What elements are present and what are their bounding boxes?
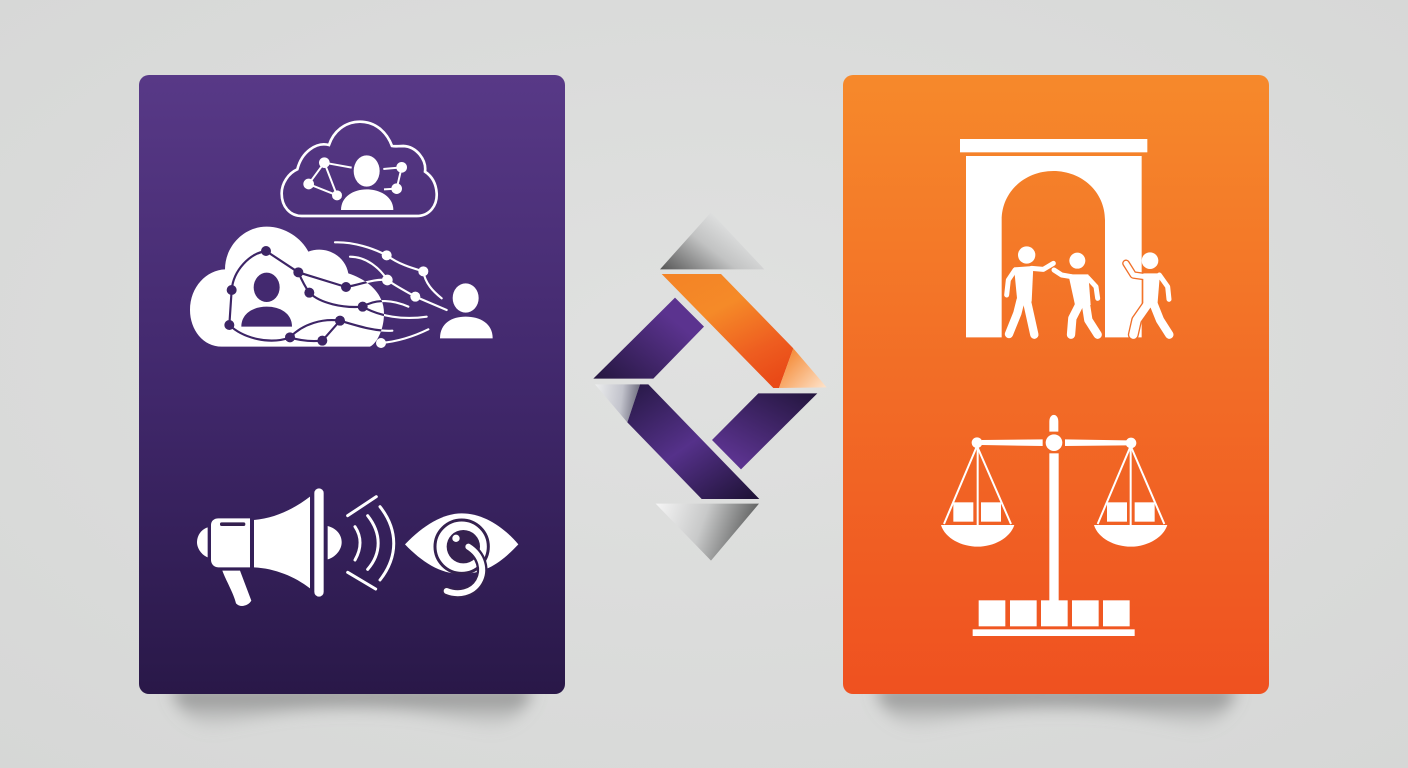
icon: eye with chain link: [405, 513, 518, 593]
purple ribbon upper left: [593, 298, 704, 379]
bottom grey triangle: [656, 504, 759, 561]
center diamond logo: [593, 212, 827, 561]
orange ribbon fold tip: [779, 348, 827, 388]
purple ribbon lower right: [712, 393, 817, 469]
infographic canvas: [139, 75, 1269, 732]
panel shadow: right: [876, 688, 1236, 728]
icon: outlined cloud with person and network: [282, 122, 437, 216]
purple ribbon long lower left: [627, 384, 759, 499]
panel shadow: left: [172, 688, 532, 728]
icon: three people at the arch: [1007, 246, 1169, 335]
panel: purple left: [139, 75, 565, 694]
orange ribbon: [662, 274, 793, 388]
icon: archway: [960, 139, 1147, 337]
panel background: orange: [843, 75, 1269, 694]
icon: balance scale with blocks: [941, 415, 1167, 636]
panel background: purple: [139, 75, 565, 694]
icon: megaphone with sound waves: [197, 488, 394, 606]
icon: filled cloud with network streaming to person: [190, 227, 493, 348]
grey fold tip left: [595, 384, 640, 422]
panel: orange right: [843, 75, 1269, 694]
top grey triangle: [660, 212, 764, 269]
